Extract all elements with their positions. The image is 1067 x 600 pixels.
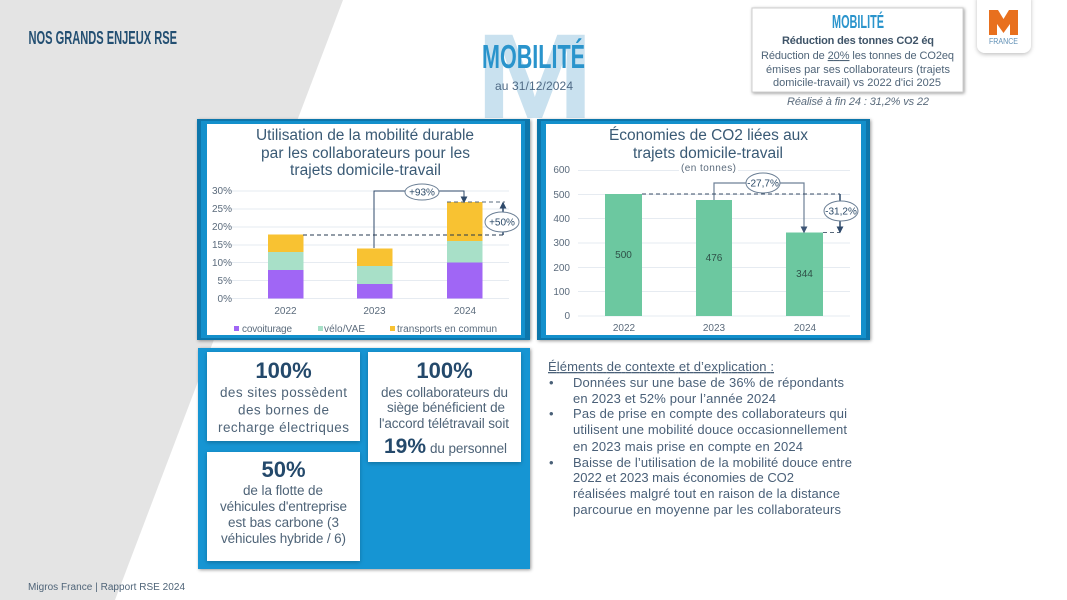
panel: key figures (198, 348, 530, 569)
logo (977, 0, 1031, 53)
context and explanation text: en 2023 mais prise en compte en 2024 (573, 439, 803, 454)
annotation: -27,7% connector: -27,7% (747, 178, 779, 190)
achieved result note: Réalisé à fin 24 : 31,2% vs 22 (787, 96, 929, 108)
y axis labels: 400 (553, 214, 570, 225)
chart title (256, 127, 474, 179)
title: MOBILITÉ (482, 38, 585, 75)
context and explanation text (548, 359, 852, 517)
stacked bars (268, 202, 482, 298)
x axis labels: 2022 (613, 323, 636, 334)
legend: vélo/VAE (324, 324, 365, 335)
panel: CO2 savings chart (537, 119, 870, 340)
card: charging stations (207, 352, 360, 441)
objective card: Réduction des tonnes CO2 éq (782, 35, 934, 47)
bars with values: 500 (615, 250, 632, 261)
card: low-carbon fleet: véhicules d'entreprise (220, 499, 347, 514)
annotation: +93% connector: +93% (409, 188, 435, 198)
chart title: Économies de CO2 liées aux (609, 127, 808, 144)
card: low-carbon fleet: de la flotte de (243, 483, 323, 498)
context and explanation text: Éléments de contexte et d’explication : (548, 359, 774, 374)
chart title: trajets domicile-travail (290, 162, 441, 179)
card: telework: l'accord télétravail soit (379, 416, 509, 431)
objective card: domicile-travail) vs 2022 d'ici 2025 (773, 77, 941, 89)
y axis labels: 15% (212, 240, 232, 251)
y axis labels: 500 (553, 190, 570, 201)
y axis labels: 600 (553, 165, 570, 176)
section heading: NOS GRANDS ENJEUX RSE (28, 28, 177, 48)
date: au 31/12/2024 (495, 79, 573, 93)
card: low-carbon fleet: véhicules hybride / 6) (221, 531, 346, 546)
y axis labels: 20% (212, 222, 232, 233)
context and explanation text: utilisent une mobilité douce occasionnellement (573, 422, 847, 437)
card: low-carbon fleet: est bas carbone (3 (228, 515, 339, 530)
context and explanation text: parcourue en moyenne par les collaborateurs (573, 502, 842, 517)
card: charging stations: des sites possèdent (220, 385, 347, 400)
card: telework (368, 352, 521, 462)
y axis labels: 10% (212, 258, 232, 269)
y axis labels (212, 186, 232, 305)
legend: covoiturage (242, 324, 292, 335)
y axis labels: 0% (218, 294, 232, 305)
annotation: -27,7% connector (714, 173, 804, 232)
context and explanation text: 2022 et 2023 mais économies de CO2 (573, 470, 794, 485)
x axis labels: 2024 (454, 306, 477, 317)
card: low-carbon fleet: 50% (261, 457, 306, 482)
annotation: -31,2% arrow: -31,2% (825, 206, 857, 218)
card: charging stations: des bornes de (238, 402, 329, 418)
y axis labels: 0 (564, 311, 570, 322)
context and explanation text: Baisse de l’utilisation de la mobilité douce entre (573, 455, 852, 470)
context and explanation text: Pas de prise en compte des collaborateurs qui (573, 406, 847, 421)
x axis labels: 2024 (794, 323, 817, 334)
context and explanation text: réalisées malgré tout en raison de la distance (573, 486, 840, 501)
context and explanation text: • (549, 455, 554, 470)
x axis labels: 2023 (363, 306, 386, 317)
chart title: Utilisation de la mobilité durable (256, 127, 474, 144)
card: telework: 19% (384, 435, 426, 458)
y axis labels: 200 (553, 263, 570, 274)
x axis labels: 2023 (703, 323, 726, 334)
chart title: (en tonnes) (681, 163, 736, 174)
annotation: +50% arrow: +50% (489, 218, 515, 228)
context and explanation text: Données sur une base de 36% de répondants (573, 375, 844, 390)
chart title (609, 127, 808, 174)
y axis labels: 30% (212, 186, 232, 197)
bars with values: 344 (796, 269, 813, 280)
y axis labels: 300 (553, 238, 570, 249)
background grey slanted shape (0, 0, 343, 600)
annotation: +50% arrow (303, 202, 519, 235)
card: telework: des collaborateurs du (381, 385, 508, 400)
card: telework: siège bénéficient de (387, 400, 505, 415)
y axis labels: 5% (218, 276, 232, 287)
chart title: trajets domicile-travail (633, 145, 783, 162)
objective card (752, 8, 963, 92)
y axis labels (553, 165, 570, 322)
logo: FRANCE (989, 37, 1018, 46)
panel: sustainable mobility chart (197, 119, 530, 340)
objective card: émises par ses collaborateurs (trajets (766, 64, 950, 76)
annotation: -31,2% arrow (642, 194, 858, 232)
title block (475, 9, 594, 145)
legend (234, 324, 497, 335)
objective card: MOBILITÉ (832, 11, 884, 32)
y axis labels: 25% (212, 204, 232, 215)
context and explanation text: • (549, 375, 554, 390)
card: low-carbon fleet (207, 452, 360, 561)
card: charging stations: 100% (255, 358, 312, 383)
x axis labels (274, 306, 477, 317)
card: telework: du personnel (430, 441, 507, 456)
annotation: +93% connector (374, 184, 464, 248)
objective card: Réduction de 20% les tonnes de CO2eq (761, 50, 954, 62)
card: charging stations: recharge électriques (218, 420, 349, 435)
bars with values: 476 (706, 253, 723, 264)
legend: transports en commun (397, 324, 497, 335)
context and explanation text: en 2023 et 52% pour l’année 2024 (573, 391, 776, 406)
chart title: par les collaborateurs pour les (261, 145, 470, 162)
bars with values (605, 194, 823, 316)
x axis labels (613, 323, 817, 334)
y axis labels: 100 (553, 287, 570, 298)
large pale letter M: M (475, 9, 594, 145)
footer: Migros France | Rapport RSE 2024 (28, 582, 185, 593)
card: telework: 100% (416, 358, 473, 383)
x axis labels: 2022 (274, 306, 297, 317)
context and explanation text: • (549, 406, 554, 421)
